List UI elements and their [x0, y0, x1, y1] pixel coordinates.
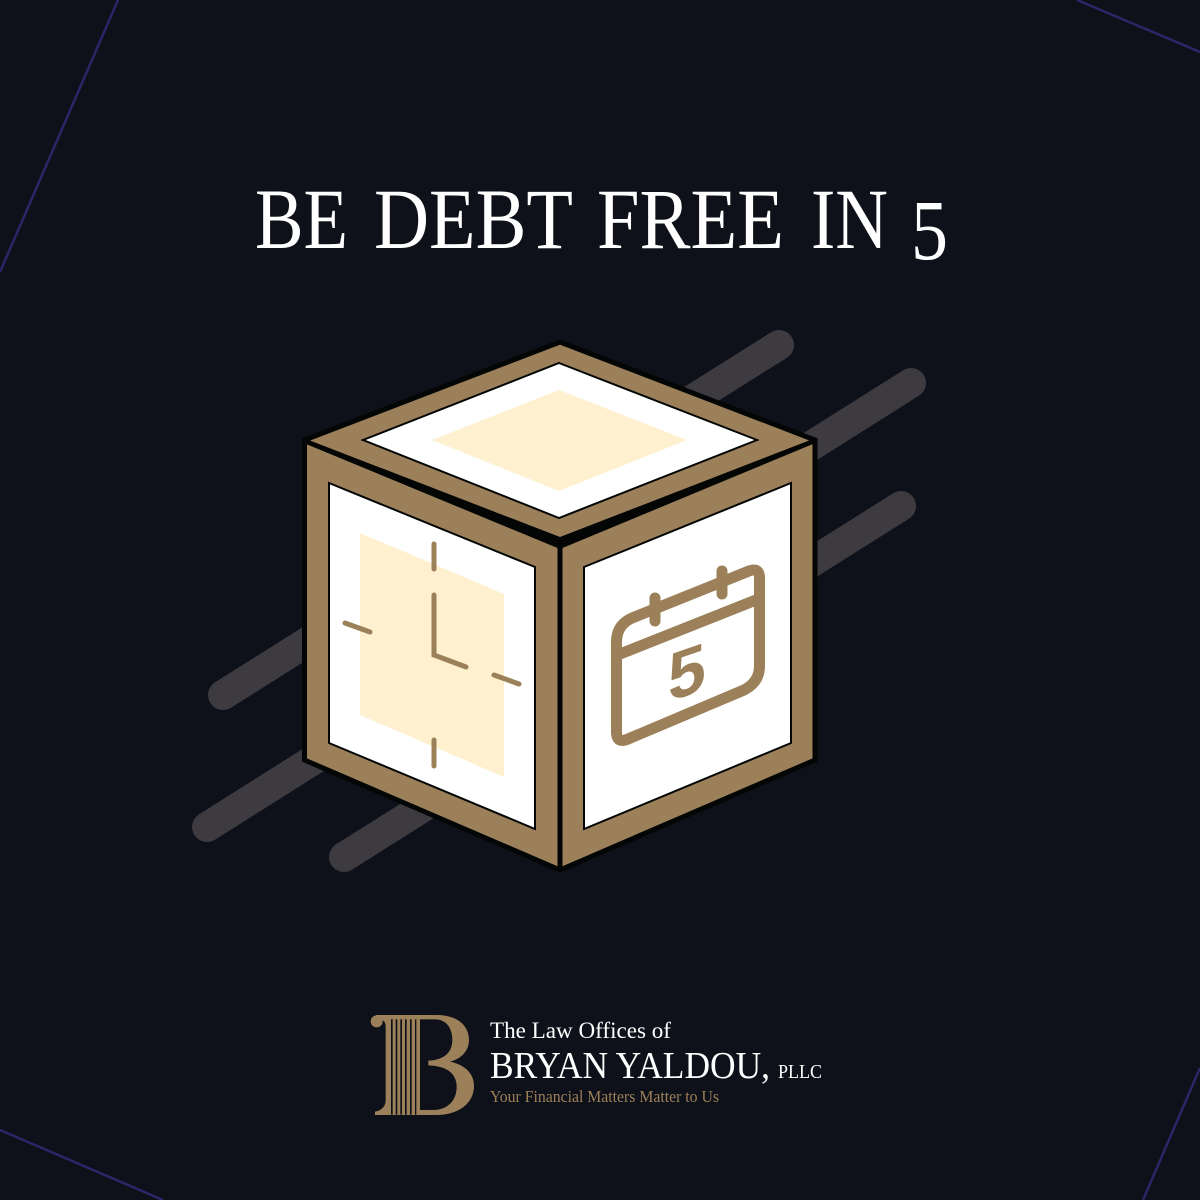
top face panel — [363, 363, 757, 518]
title: FREE — [597, 171, 784, 267]
title: BE — [255, 171, 348, 267]
cube edges — [306, 439, 813, 870]
logo line: firm name: BRYAN YALDOU, — [490, 1045, 770, 1087]
speed stripes behind cube — [207, 345, 911, 857]
logo tagline: Your Financial Matters Matter to Us — [490, 1087, 719, 1106]
logo — [371, 1015, 822, 1115]
title: IN — [811, 171, 888, 267]
logo line: firm prefix: The Law Offices of — [490, 1018, 671, 1043]
isometric cube — [304, 342, 815, 870]
left face panel: clock — [329, 483, 535, 829]
right face panel: calendar — [584, 483, 791, 829]
title: DEBT — [374, 171, 573, 267]
logo line: PLLC: PLLC — [778, 1062, 822, 1083]
cube body — [304, 342, 815, 870]
icon: calendar with 5 — [616, 570, 760, 740]
title: 5 — [911, 182, 948, 278]
logo mark: column B — [371, 1015, 474, 1115]
title — [255, 171, 948, 278]
icon: calendar with 5: 5 — [668, 628, 706, 717]
icon: clock ticks and hands — [345, 544, 519, 766]
